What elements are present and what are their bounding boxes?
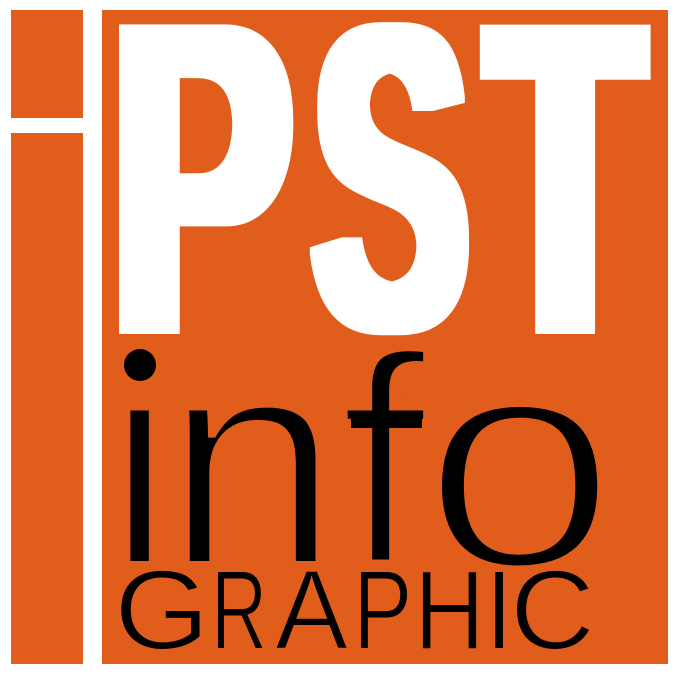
heading: PST bbox=[112, 0, 641, 426]
heading: GRAPHIC: C bbox=[510, 548, 595, 674]
heading: info: n bbox=[164, 293, 340, 629]
heading: GRAPHIC: P bbox=[353, 547, 413, 673]
heading: GRAPHIC: G bbox=[114, 548, 210, 674]
heading: GRAPHIC bbox=[114, 546, 595, 674]
heading: GRAPHIC: R bbox=[211, 547, 267, 673]
heading: info: ı bbox=[98, 293, 181, 629]
heading: GRAPHIC: H bbox=[414, 548, 485, 674]
heading: info: f bbox=[337, 291, 430, 630]
heading: GRAPHIC: I bbox=[485, 547, 513, 673]
heading: GRAPHIC: A bbox=[275, 546, 349, 673]
heading: info bbox=[98, 290, 617, 632]
heading: info: o bbox=[422, 290, 617, 632]
orange column: stem of the i bbox=[11, 133, 83, 664]
orange column: dot of the i bbox=[11, 10, 83, 118]
